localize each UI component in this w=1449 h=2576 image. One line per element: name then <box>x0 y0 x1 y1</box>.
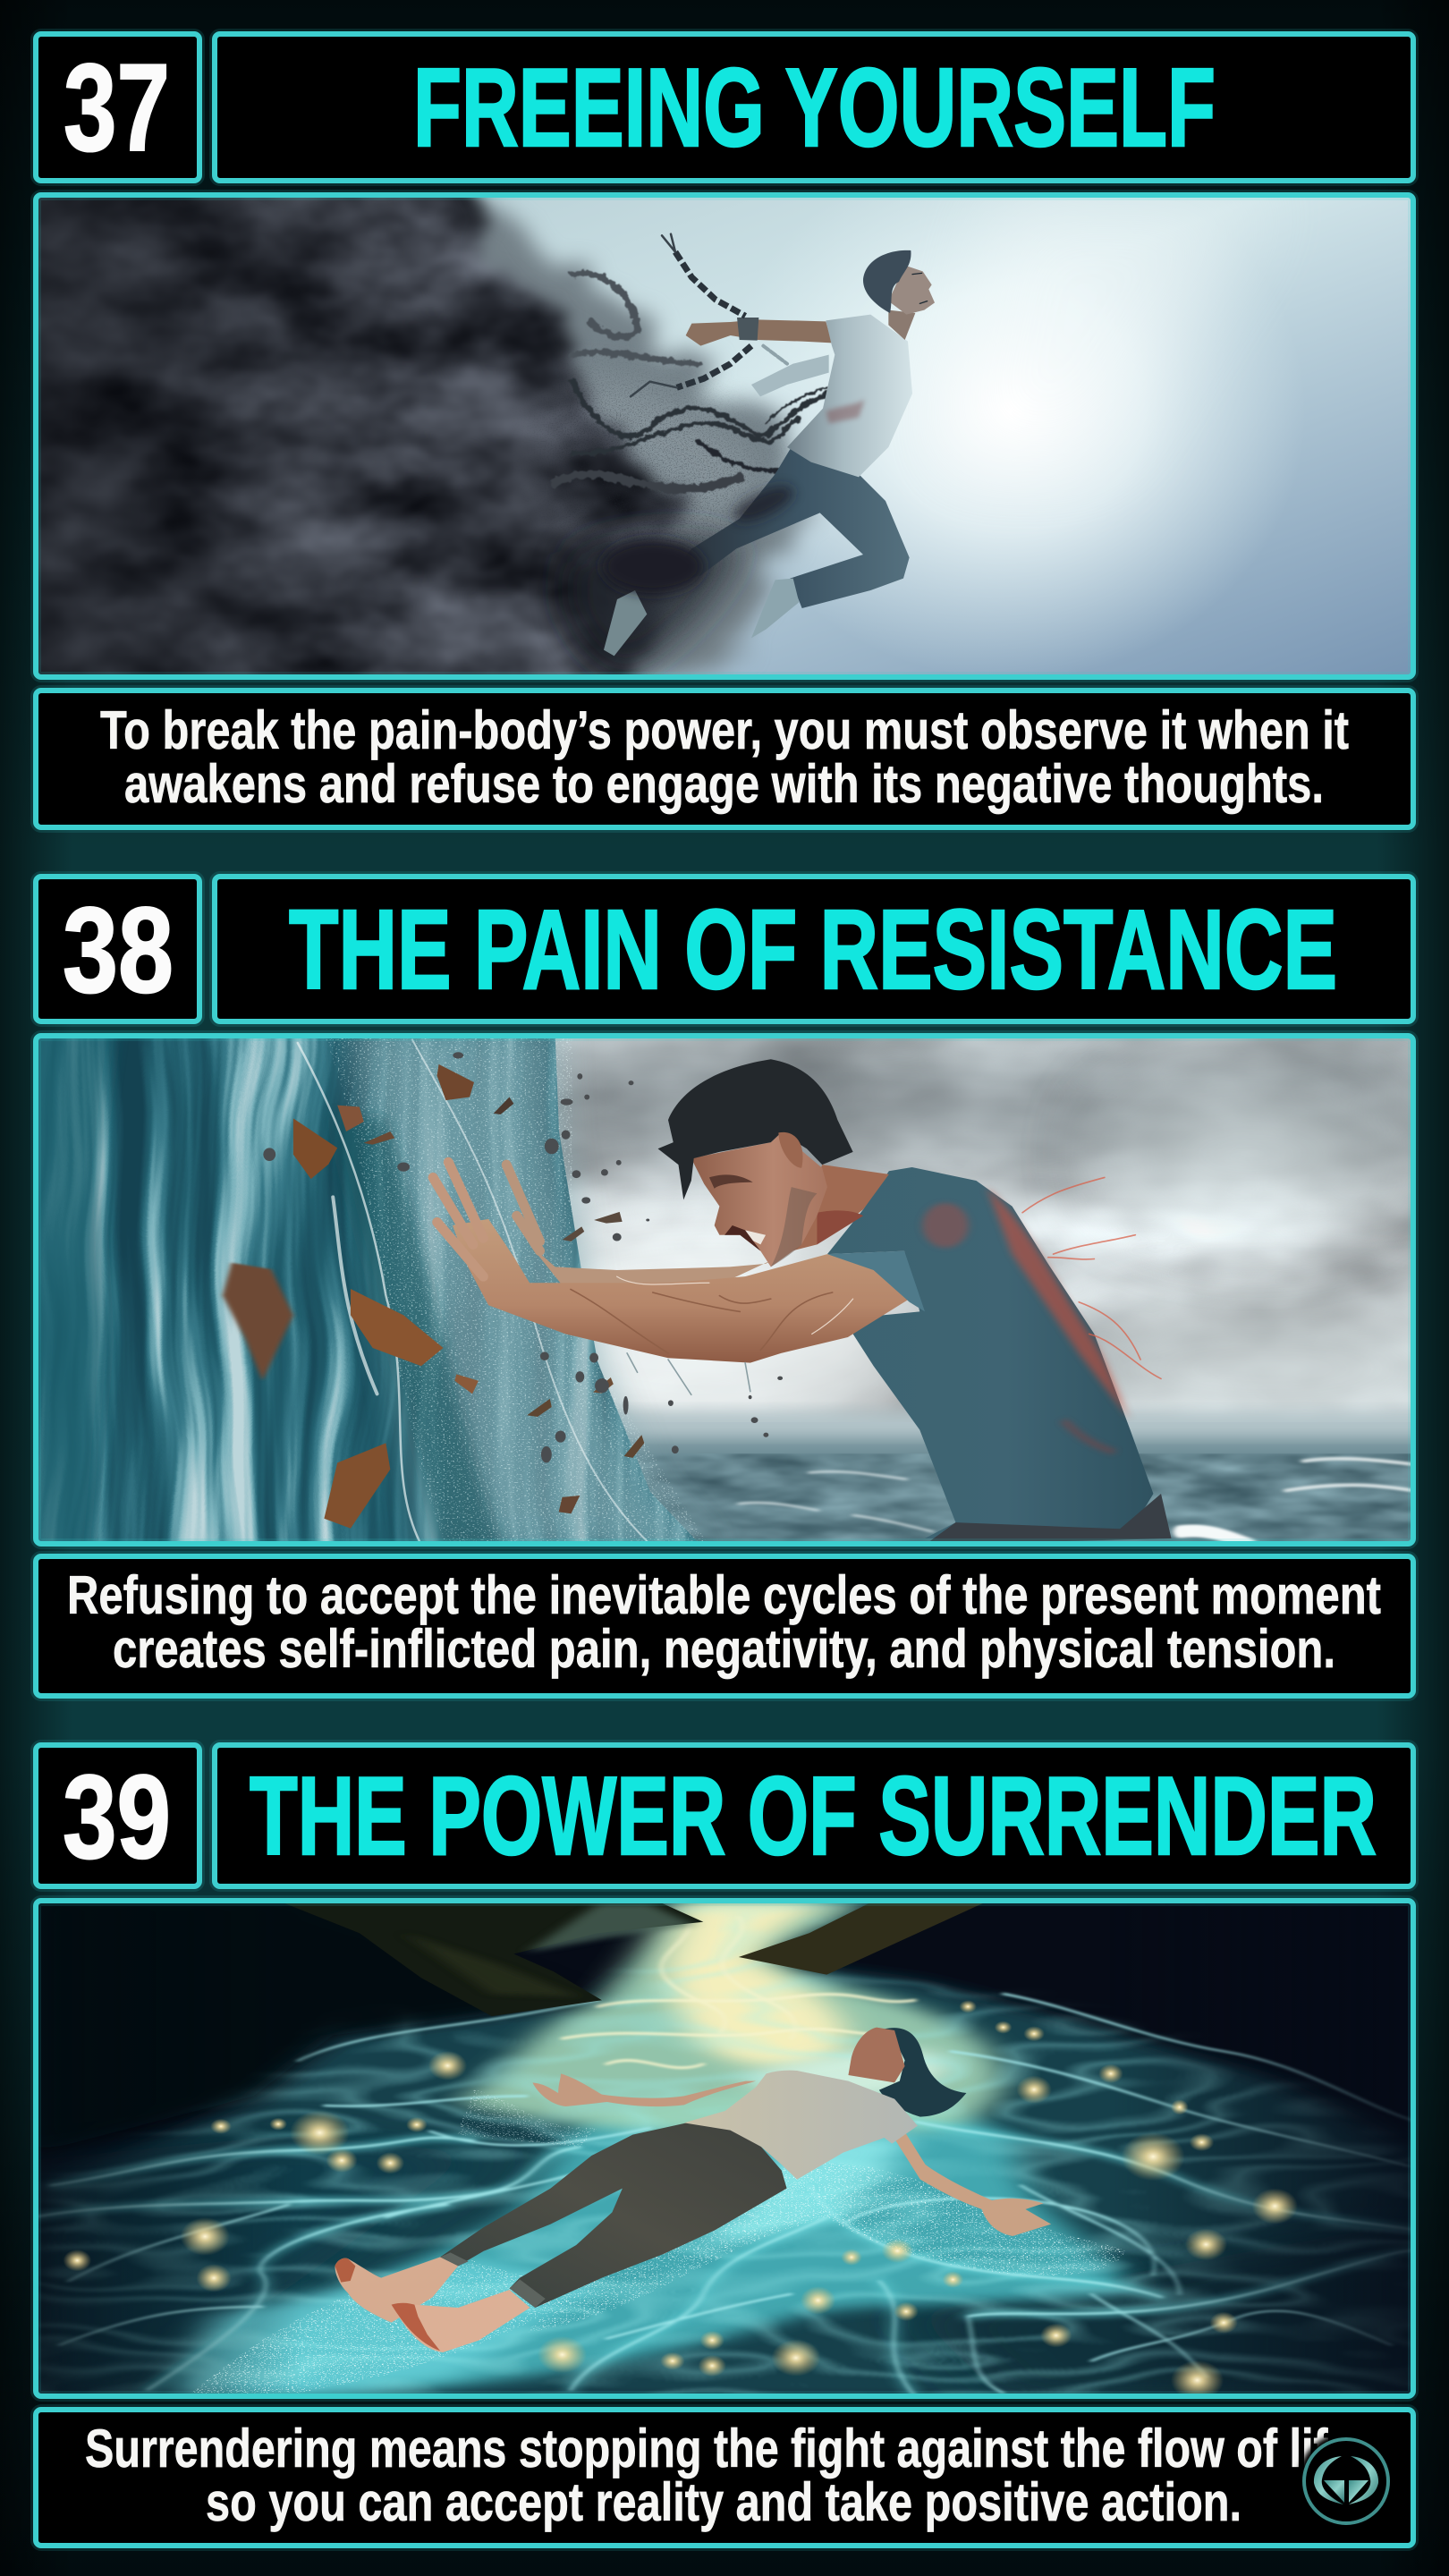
panel: section 37 freeing yourself <box>18 34 1416 827</box>
illustration: man pushing against a wall of water <box>18 1020 1449 1556</box>
sea <box>33 1411 1431 1547</box>
caption 39: so you can accept reality and take positive action. <box>206 2472 1241 2532</box>
illustration: man breaking free from smoke and chains <box>30 190 1419 682</box>
falling rocks <box>223 1052 783 1529</box>
caption 37 <box>36 691 1413 827</box>
panel: section 38 the pain of resistance <box>18 877 1449 1696</box>
caustic ripples <box>15 1902 1436 2406</box>
water wall <box>38 1038 707 1541</box>
current lines <box>33 1917 1416 2396</box>
sparkling water <box>191 2089 1127 2393</box>
glowing river <box>15 1902 1436 2399</box>
smoke cloud <box>38 198 828 674</box>
floating person <box>335 2028 1051 2352</box>
dark hills <box>33 1898 995 2154</box>
number box 38: 38 <box>63 882 174 1018</box>
caption 39 <box>36 2410 1413 2546</box>
number box 37: 37 <box>64 38 170 177</box>
icon: circular logo badge <box>1298 2433 1394 2529</box>
straining man <box>433 1059 1172 1545</box>
man figure <box>602 234 935 656</box>
illustration: person floating on a glowing river <box>15 1898 1436 2406</box>
heading: freeing yourself <box>215 34 1413 181</box>
glowing orbs <box>64 2000 1298 2400</box>
stormy sky <box>555 1038 1411 1422</box>
panel: section 39 the power of surrender <box>15 1745 1436 2546</box>
caption 38 <box>36 1556 1413 1696</box>
dark edges <box>33 1898 1416 2399</box>
number box 39: 39 <box>63 1751 171 1884</box>
